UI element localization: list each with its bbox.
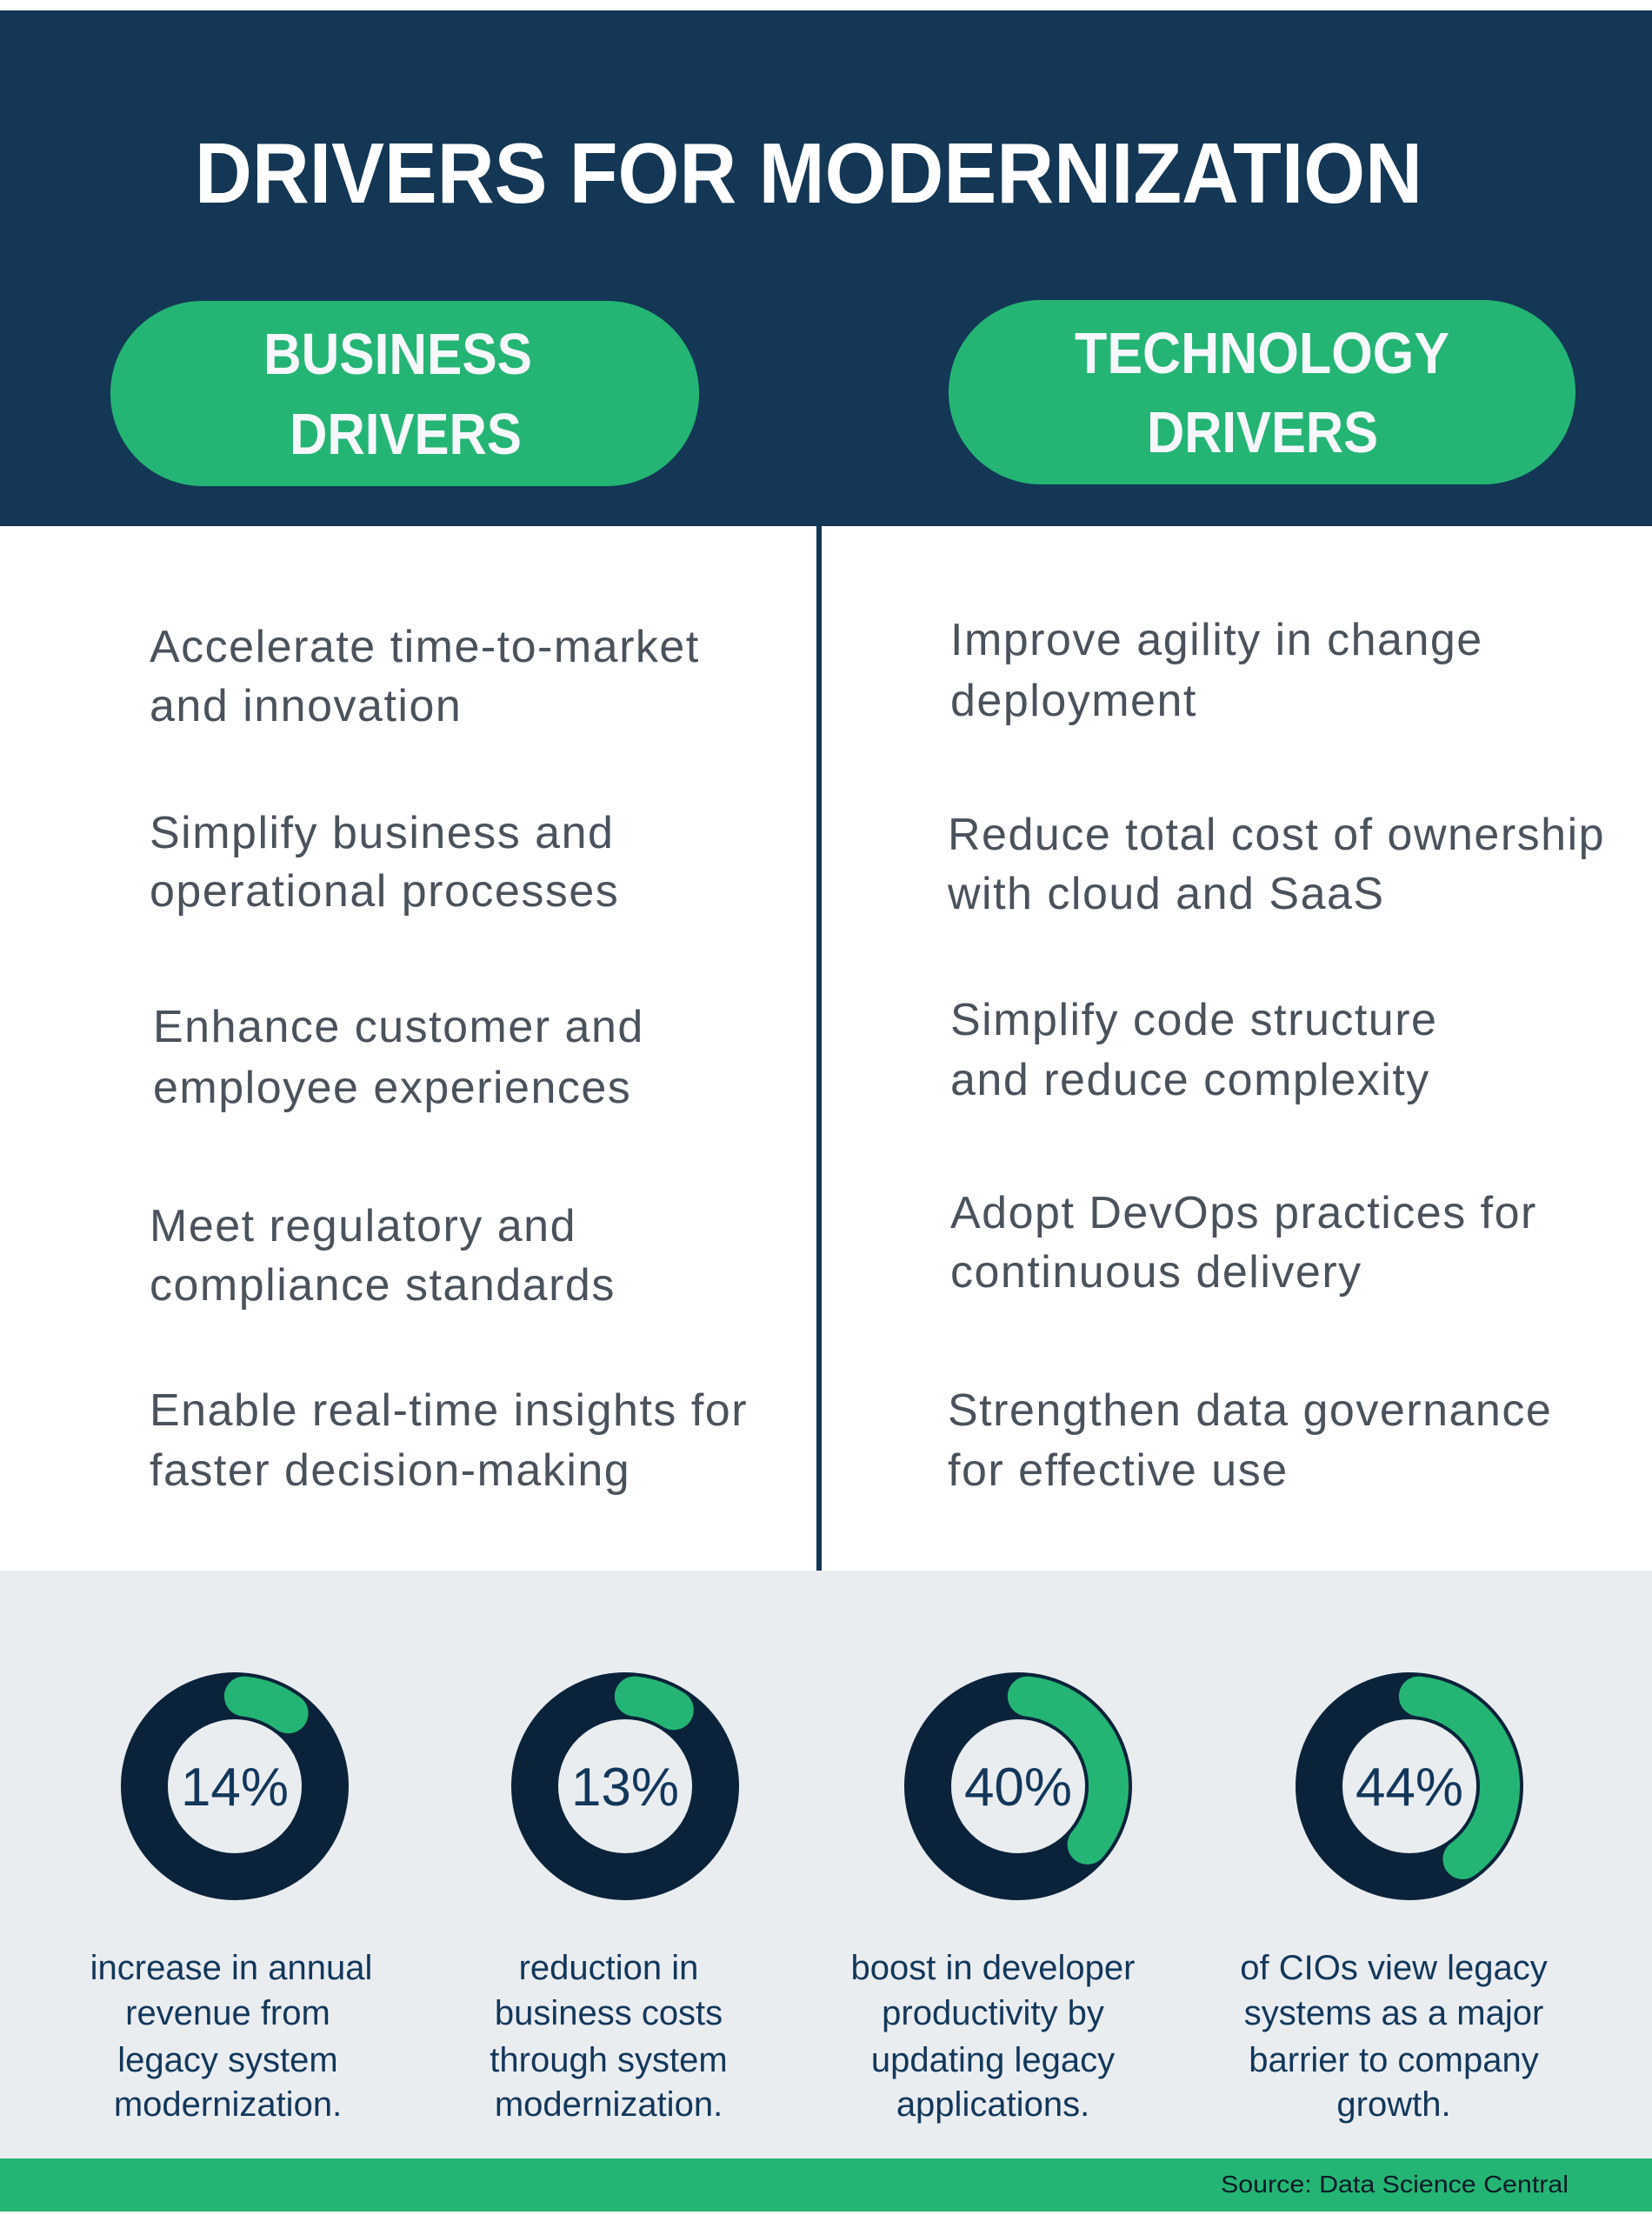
captions: productivity by [882, 1994, 1104, 2032]
captions: updating legacy [871, 2041, 1115, 2079]
business drivers list: Meet regulatory and [150, 1201, 576, 1251]
donut: 14% [136, 1687, 334, 1885]
business drivers list: operational processes [150, 866, 619, 917]
business drivers list: Accelerate time-to-market [150, 622, 700, 672]
header panel [0, 10, 1652, 526]
captions: modernization. [495, 2085, 723, 2124]
pill: technology drivers: TECHNOLOGY [1075, 321, 1449, 386]
donut: 40% [919, 1687, 1117, 1885]
pill: business drivers: DRIVERS [290, 402, 522, 467]
pill: technology drivers: DRIVERS [1147, 400, 1378, 465]
title: DRIVERS FOR MODERNIZATION [195, 125, 1422, 221]
donut: 14%: 14% [181, 1758, 289, 1818]
captions: reduction in [519, 1949, 698, 1987]
captions: boost in developer [851, 1949, 1135, 1987]
stats panel [0, 1571, 1652, 2158]
captions: through system [490, 2041, 728, 2079]
technology drivers list: Reduce total cost of ownership [948, 810, 1605, 860]
captions: revenue from [125, 1994, 330, 2032]
captions: growth. [1336, 2085, 1451, 2124]
business drivers list: Simplify business and [150, 808, 614, 858]
technology drivers list: with cloud and SaaS [947, 869, 1385, 919]
business drivers list: employee experiences [153, 1063, 631, 1113]
technology drivers list: Strengthen data governance [948, 1385, 1552, 1436]
technology drivers list: for effective use [948, 1445, 1289, 1496]
captions: business costs [495, 1994, 723, 2032]
captions: of CIOs view legacy [1240, 1949, 1548, 1987]
business drivers list: compliance standards [150, 1260, 616, 1311]
donut: 40%: 40% [964, 1758, 1072, 1818]
footer [0, 2158, 1652, 2212]
captions: modernization. [114, 2085, 342, 2124]
technology drivers list: continuous delivery [950, 1247, 1362, 1298]
technology drivers list: Simplify code structure [950, 995, 1437, 1045]
business drivers list: Enhance customer and [153, 1002, 644, 1052]
donut: 44% [1310, 1687, 1509, 1885]
business drivers list: faster decision-making [150, 1445, 630, 1496]
donut: 44%: 44% [1356, 1758, 1463, 1818]
source: Source: Data Science Central [1221, 2171, 1569, 2198]
technology drivers list: Adopt DevOps practices for [950, 1188, 1537, 1238]
technology drivers list: and reduce complexity [950, 1055, 1430, 1105]
technology drivers list: deployment [950, 676, 1197, 726]
captions: increase in annual [90, 1949, 372, 1987]
technology drivers list [947, 615, 1605, 1496]
donut: 13% [526, 1687, 724, 1885]
pill: technology drivers [949, 300, 1575, 484]
pill: business drivers [110, 301, 699, 486]
pill: business drivers: BUSINESS [263, 322, 532, 387]
captions: barrier to company [1249, 2041, 1539, 2079]
captions: legacy system [117, 2041, 338, 2079]
business drivers list: Enable real-time insights for [150, 1385, 748, 1436]
technology drivers list: Improve agility in change [950, 615, 1483, 665]
captions [90, 1949, 1548, 2124]
donut: 13%: 13% [571, 1758, 679, 1818]
captions: systems as a major [1244, 1994, 1543, 2032]
captions: applications. [896, 2085, 1089, 2124]
business drivers list [150, 622, 748, 1496]
business drivers list: and innovation [150, 681, 462, 731]
